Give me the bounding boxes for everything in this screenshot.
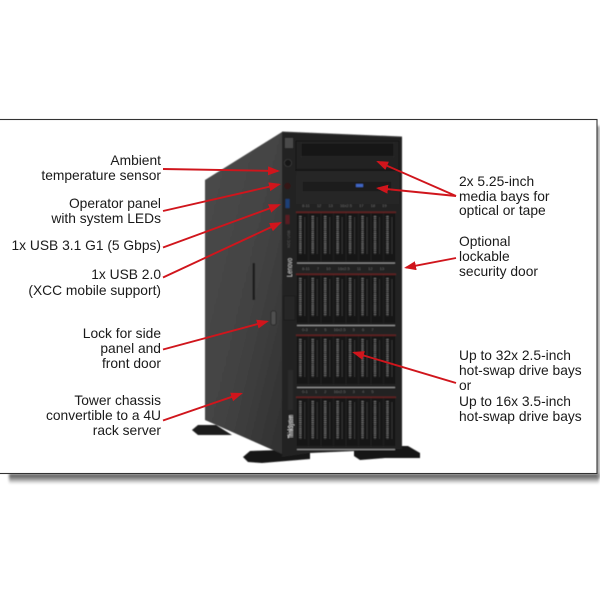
control strip: ThinkSystem (286, 415, 295, 438)
label: lock: panel and (100, 341, 161, 356)
label: ambient temperature sensor: temperature sensor (41, 168, 161, 183)
label: ambient temperature sensor (41, 153, 161, 183)
foot: front left (243, 449, 310, 463)
arrow: operator panel (163, 184, 279, 211)
tower server (192, 132, 420, 463)
rectangular recess (284, 296, 295, 320)
foot: front right (354, 446, 420, 460)
label: operator panel: Operator panel (69, 196, 161, 211)
arrow: usb 2.0 (163, 223, 280, 278)
arrows (163, 162, 456, 421)
lenovo text: Lenovo (287, 258, 294, 277)
side panel handle slot (252, 263, 255, 300)
vent grille (288, 370, 293, 410)
drive bays row 4 (296, 387, 396, 450)
top edge highlight (282, 132, 402, 137)
label: media bays: media bays for (459, 189, 550, 204)
media bay 2 (296, 170, 399, 204)
arrow: tower chassis (163, 394, 241, 420)
row label: 8-11 7 10 16x2.5 11 12 13 (302, 266, 385, 271)
label: drive bays: hot-swap drive bays (459, 363, 582, 378)
front bezel (282, 132, 402, 457)
row label: 0-3 4 5 16x2.5 5 6 7 (302, 327, 374, 332)
arrow: media bay 2 (378, 188, 456, 196)
drive bays row 1 (296, 203, 396, 261)
label: security door: lockable (459, 249, 510, 264)
usb 3.1 port (286, 199, 290, 208)
label: usb 2.0 (28, 267, 161, 298)
label: media bays: 2x 5.25-inch (459, 174, 534, 189)
label: drive bays: or (459, 378, 472, 393)
label: drive bays (459, 348, 582, 424)
label: media bays: optical or tape (459, 203, 546, 218)
temperature sensor (284, 159, 292, 167)
control strip (284, 138, 295, 438)
label: drive bays: hot-swap drive bays (459, 409, 582, 424)
arrow: lock (163, 322, 267, 350)
label: usb 2.0: (XCC mobile support) (28, 283, 161, 298)
arrow: security door (406, 258, 456, 268)
label: drive bays: Up to 16x 3.5-inch (459, 394, 571, 409)
label: lock (83, 326, 161, 371)
drive bays row 3 (296, 325, 396, 384)
label: usb 3.1: 1x USB 3.1 G1 (5 Gbps) (11, 238, 161, 253)
label: tower chassis: Tower chassis (74, 393, 161, 408)
label: tower chassis: rack server (93, 423, 161, 438)
blue status led (356, 184, 363, 187)
drive bays row 2 (296, 263, 396, 323)
panel: framed background (0, 120, 600, 484)
side panel lock (271, 311, 276, 325)
usb 2.0 port (286, 215, 290, 224)
arrow: usb 3.1 (163, 205, 279, 248)
label: media bays (459, 174, 550, 218)
label: security door: Optional (459, 234, 510, 249)
label: operator panel (50, 196, 161, 226)
label: lock: front door (102, 356, 161, 371)
label: tower chassis (46, 393, 161, 438)
label: security door (459, 234, 538, 279)
media bay 1 (296, 141, 399, 175)
strip label: XCC USB (286, 230, 291, 248)
label: ambient temperature sensor: Ambient (110, 153, 161, 168)
label: tower chassis: convertible to a 4U (46, 408, 161, 423)
label: drive bays: Up to 32x 2.5-inch (459, 348, 571, 363)
label: security door: security door (459, 264, 538, 279)
label: usb 2.0: 1x USB 2.0 (91, 267, 161, 282)
operator panel button (284, 183, 291, 189)
arrow: ambient temperature sensor (163, 169, 278, 171)
label: lock: Lock for side (83, 326, 161, 341)
side panel (205, 132, 282, 454)
label: operator panel: with system LEDs (50, 211, 161, 226)
row label: 8-11 12 13 16x2.5 17 18 19 (302, 203, 387, 208)
arrow: drive bays (354, 353, 456, 383)
row label: 0-1 1 2 16x2.5 3 4 5 (302, 389, 374, 394)
arrow: media bay 1 (378, 162, 456, 196)
foot: rear left (192, 425, 232, 435)
